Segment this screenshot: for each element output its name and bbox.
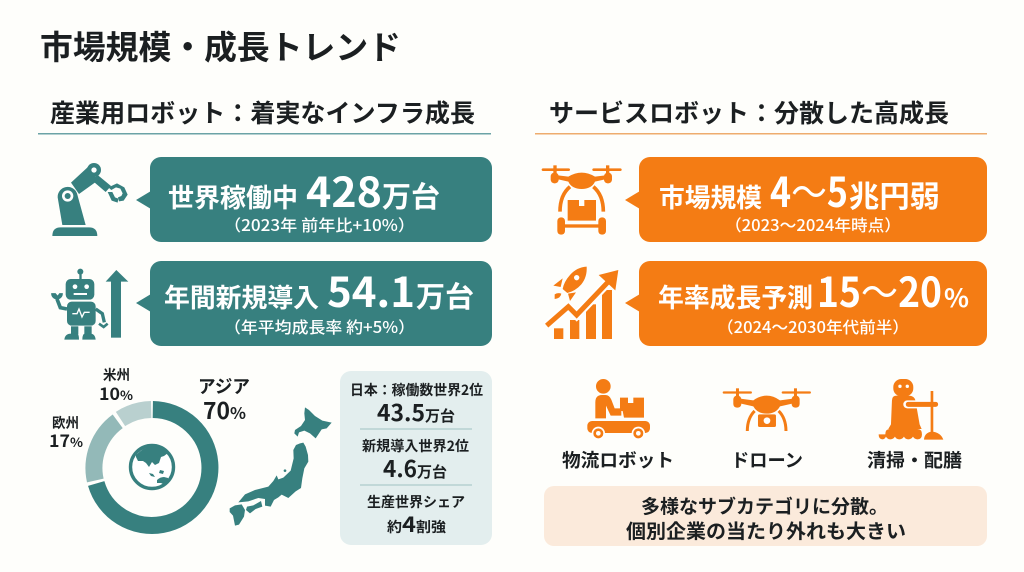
subcategory: cleaning and serving [867, 379, 962, 473]
icon: globe [130, 446, 174, 488]
callout: annual growth forecast: 15〜20 [817, 259, 942, 319]
stat: production share [367, 492, 465, 539]
subcategory: cleaning and serving: 清掃・配膳 [867, 447, 962, 473]
panel: industrial robots [38, 94, 492, 545]
stat: production share: 4 [402, 509, 416, 539]
stat: new installations [362, 436, 469, 484]
stat: production share: 生産世界シェア [367, 492, 465, 512]
icon: drone [723, 388, 811, 431]
stat: production share: 割強 [416, 517, 446, 537]
icon: robot with up arrow [52, 269, 128, 340]
label: Europe: 17 [49, 427, 70, 452]
label: Asia: アジア [198, 373, 250, 399]
segment: Americas 10% [120, 410, 151, 419]
callout: annual new installations: （年平均成長率 約+5%） [224, 314, 415, 338]
callout: worldwide operating stock: （2023年 前年比+10%） [224, 212, 415, 236]
label: Europe [49, 413, 83, 452]
stat: operating stock: 43.5 [377, 394, 425, 428]
callout: annual new installations: 年間新規導入 [164, 278, 319, 315]
callout: worldwide operating stock: 世界稼働中 [168, 178, 298, 215]
map: Japan [230, 407, 332, 526]
callout: annual new installations [136, 259, 492, 346]
callout: annual growth forecast [625, 259, 987, 346]
stat: operating stock [350, 380, 483, 428]
heading: industrial robots: 産業用ロボット：着実なインフラ成長 [50, 94, 475, 130]
callout: worldwide operating stock: 428 [306, 159, 382, 219]
icon: delivery drone [542, 165, 622, 235]
callout: market size: （2023〜2024年時点） [725, 212, 901, 236]
donut chart: regional share [49, 365, 250, 525]
icon: robot arm [52, 163, 128, 236]
subcategory: logistics robots [562, 379, 674, 473]
stat: new installations: 4.6 [383, 450, 417, 484]
callout: annual growth forecast: 年率成長予測 [658, 278, 813, 315]
label: Asia: % [230, 400, 246, 424]
icon: cleaning robot [879, 379, 943, 440]
icon: logistics robot [587, 379, 650, 440]
callout: diversified subcategories note: 個別企業の当たり外れも大きい [626, 515, 906, 544]
label: Americas [99, 365, 133, 405]
subcategory: drones: ドローン [731, 447, 803, 473]
callout: annual new installations: 万台 [416, 274, 474, 316]
callout: annual growth forecast: % [944, 279, 969, 315]
callout: annual growth forecast: （2024〜2030年代前半） [717, 314, 909, 338]
panel: Japan stats [340, 371, 492, 545]
label: Americas: 10 [99, 380, 120, 405]
callout: market size: 4〜5 [770, 159, 848, 219]
segment: Europe 17% [94, 421, 118, 480]
subcategory: logistics robots: 物流ロボット [562, 447, 674, 473]
callout: market size: 市場規模 [659, 178, 762, 215]
segment: Asia 70% [96, 410, 210, 525]
panel: service robots [535, 94, 987, 546]
callout: worldwide operating stock: 万台 [382, 174, 440, 216]
callout: diversified subcategories note [544, 486, 987, 546]
label: Europe: 欧州 [52, 413, 79, 433]
label: Americas: % [120, 385, 133, 404]
subcategory: drones [723, 388, 811, 473]
callout: market size: 兆円弱 [849, 172, 940, 216]
stat: production share: 約 [387, 517, 402, 537]
label: Europe: % [70, 432, 83, 451]
stat: new installations: 新規導入世界2位 [362, 436, 469, 456]
callout: annual new installations: 54.1 [327, 259, 415, 319]
callout: diversified subcategories note: 多様なサブカテゴリに分散。 [641, 492, 888, 519]
label: Americas: 米州 [103, 365, 130, 385]
label: Asia: 70 [203, 392, 230, 426]
stat: new installations: 万台 [417, 461, 447, 482]
title: 市場規模・成長トレンド [40, 21, 401, 69]
callout: market size [625, 157, 987, 242]
stat: operating stock: 日本：稼働数世界2位 [350, 380, 483, 400]
callout: worldwide operating stock [136, 157, 492, 242]
heading: service robots: サービスロボット：分散した高成長 [549, 94, 949, 130]
label: Asia [198, 373, 250, 426]
stat: operating stock: 万台 [425, 405, 455, 426]
icon: rocket and growth chart [547, 267, 618, 339]
